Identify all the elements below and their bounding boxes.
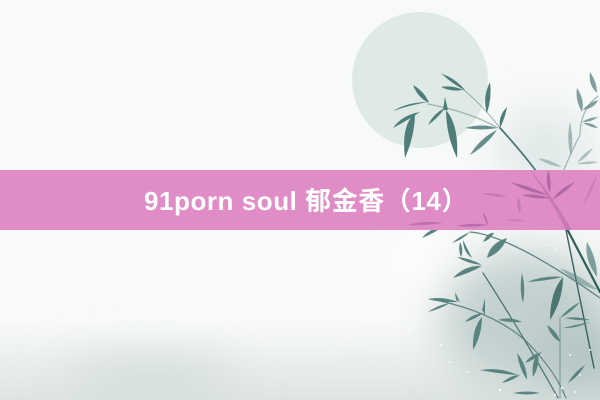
bamboo inside band (408, 170, 597, 230)
title: 91porn soul 郁金香（14） (144, 186, 468, 216)
pink title band (0, 170, 600, 230)
ink wash background (0, 110, 600, 400)
bamboo leaves right (538, 72, 598, 167)
bamboo leaves lower (422, 225, 598, 394)
snow speckles (409, 244, 591, 396)
moon circle (352, 12, 488, 148)
bamboo leaves upper (393, 74, 507, 158)
bamboo stems (428, 74, 600, 398)
